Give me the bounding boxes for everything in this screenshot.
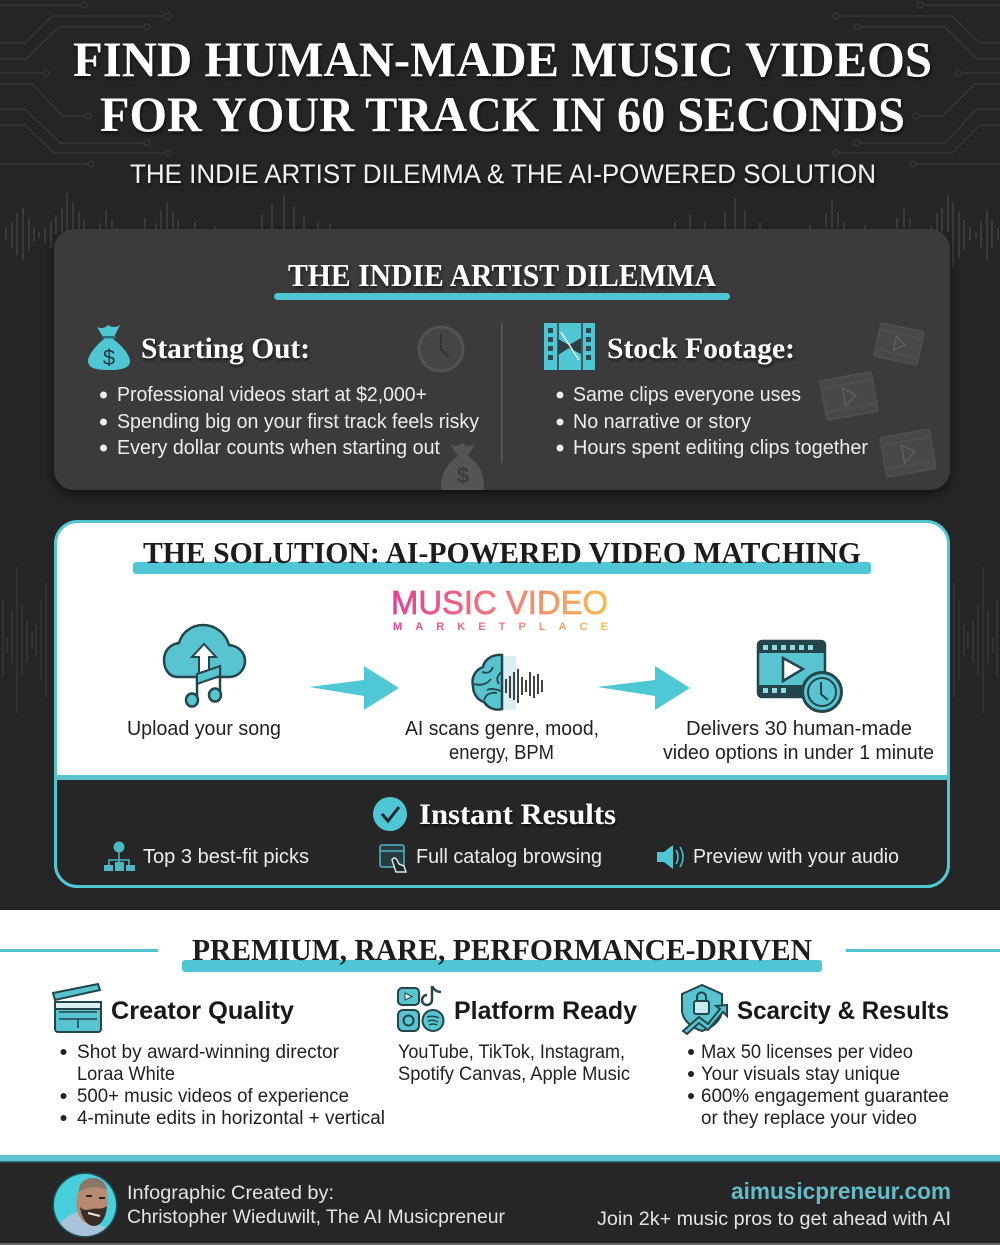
- icon: cloud upload with music note: [164, 625, 245, 706]
- icon: clapperboard: [53, 984, 101, 1032]
- list: platform ready: Spotify Canvas, Apple Music: [398, 1064, 630, 1085]
- avatar: christopher wieduwilt: [52, 1172, 118, 1240]
- label: top 3 picks: Top 3 best-fit picks: [143, 846, 309, 868]
- title: FIND HUMAN-MADE MUSIC VIDEOS: [73, 31, 932, 87]
- heading: stock footage: Stock Footage:: [607, 332, 795, 365]
- arrow: scan to delivery: [597, 666, 690, 710]
- heading: starting out: Starting Out:: [141, 332, 310, 365]
- icon: crossed-out film strip: [544, 323, 595, 370]
- label: ai scans: AI scans genre, mood,: [405, 718, 599, 740]
- label: preview with audio: Preview with your audio: [693, 846, 899, 868]
- icon: money bag: $: [103, 345, 115, 370]
- list: creator quality: Shot by award-winning director: [77, 1042, 340, 1063]
- heading: the solution: THE SOLUTION: AI-POWERED VIDEO MATCHING: [143, 535, 861, 570]
- arrow: upload to scan: [309, 666, 399, 710]
- label: upload your song: Upload your song: [127, 718, 281, 740]
- icon: catalog window: [380, 845, 406, 872]
- label: ai scans: [405, 718, 599, 764]
- heading: platform ready: Platform Ready: [454, 997, 637, 1025]
- icon: check badge: [373, 797, 407, 831]
- icon: ghost film strips: [820, 323, 936, 477]
- list: stock footage: Hours spent editing clips together: [573, 437, 868, 459]
- credit text: Infographic Created by:: [127, 1182, 334, 1204]
- list: starting out: Spending big on your first track feels risky: [117, 411, 479, 433]
- list: starting out: Every dollar counts when starting out: [117, 437, 440, 459]
- label: delivers 30 videos: [663, 718, 934, 764]
- icon: ghost money bag: [441, 443, 484, 490]
- panel: the indie artist dilemma: [54, 229, 950, 500]
- list: starting out: Professional videos start at $2,000+: [117, 384, 427, 406]
- list: starting out: [100, 384, 479, 459]
- icon: hierarchy picks: [104, 842, 135, 871]
- icon: speaker: [657, 845, 683, 869]
- credit text: [127, 1182, 505, 1228]
- heading: scarcity and results: Scarcity & Results: [737, 997, 949, 1025]
- heading: creator quality: Creator Quality: [111, 997, 294, 1025]
- label: delivers 30 videos: video options in under 1 minute: [663, 742, 934, 764]
- list: creator quality: Loraa White: [77, 1064, 175, 1085]
- list: platform ready: [398, 1042, 630, 1085]
- list: stock footage: Same clips everyone uses: [573, 384, 801, 406]
- footer: [0, 1155, 1000, 1245]
- heading: instant results: Instant Results: [419, 798, 616, 831]
- icon: platform logos: [398, 986, 444, 1031]
- list: scarcity and results: 600% engagement guarantee: [701, 1086, 949, 1107]
- icon: shield with lock and growth arrow: [682, 985, 727, 1034]
- heading: premium: PREMIUM, RARE, PERFORMANCE-DRIVEN: [192, 932, 812, 967]
- label: ai scans: energy, BPM: [449, 742, 554, 764]
- panel: premium, rare, performance-driven: [0, 910, 1000, 1155]
- list: scarcity and results: or they replace your video: [701, 1108, 917, 1129]
- title: [73, 31, 932, 142]
- icon: video with clock: [758, 641, 842, 712]
- background circuit lines: [0, 2, 1000, 167]
- icon: ghost money bag: $: [457, 463, 469, 488]
- website link: aimusicpreneur.com: [731, 1178, 951, 1204]
- list: platform ready: YouTube, TikTok, Instagram,: [398, 1042, 625, 1063]
- list: stock footage: No narrative or story: [573, 411, 751, 433]
- logo: music video marketplace: MARKETPLACE: [393, 621, 608, 633]
- background waveforms: [6, 193, 998, 268]
- label: full catalog: Full catalog browsing: [416, 846, 602, 868]
- list: scarcity and results: Max 50 licenses per video: [701, 1042, 913, 1063]
- icon: brain and waveform: [472, 655, 542, 710]
- list: stock footage: [556, 384, 868, 459]
- icon: money bag: [88, 325, 130, 370]
- list: creator quality: 4-minute edits in horizontal + vertical: [77, 1108, 385, 1129]
- list: creator quality: [60, 1042, 385, 1129]
- panel: the solution: [54, 522, 950, 886]
- subtitle: THE INDIE ARTIST DILEMMA & THE AI-POWERED SOLUTION: [130, 159, 876, 189]
- list: scarcity and results: Your visuals stay unique: [701, 1064, 900, 1085]
- heading: the indie artist dilemma: THE INDIE ARTIST DILEMMA: [288, 257, 716, 293]
- logo: music video marketplace: MUSIC VIDEO: [391, 584, 608, 621]
- title: FOR YOUR TRACK IN 60 SECONDS: [100, 86, 905, 142]
- list: creator quality: 500+ music videos of experience: [77, 1086, 349, 1107]
- icon: ghost clock: [419, 327, 463, 371]
- credit text: Christopher Wieduwilt, The AI Musicpreneur: [127, 1206, 505, 1228]
- label: delivers 30 videos: Delivers 30 human-made: [686, 718, 912, 740]
- list: scarcity and results: [688, 1042, 949, 1129]
- call to action: Join 2k+ music pros to get ahead with AI: [597, 1208, 951, 1230]
